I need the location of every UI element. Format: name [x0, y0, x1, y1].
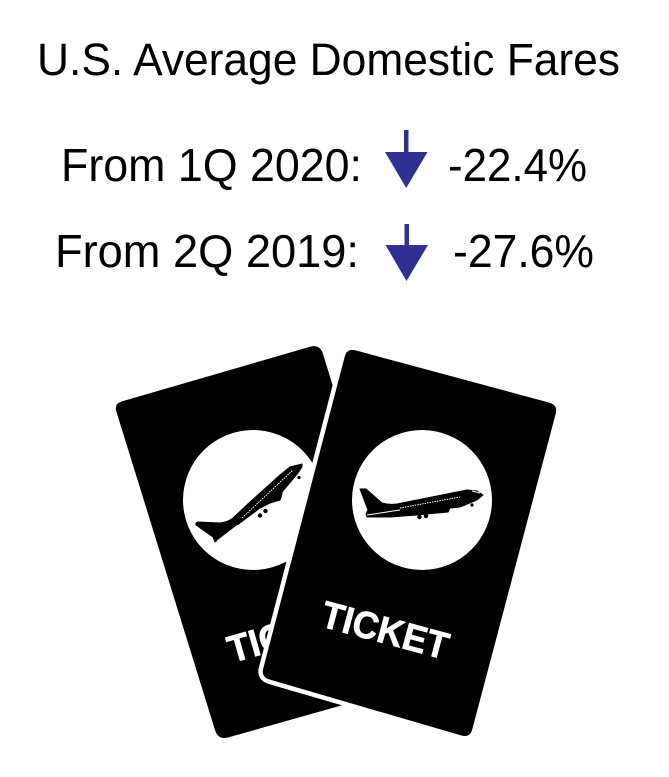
- title: U.S. Average Domestic Fares: [37, 34, 620, 85]
- ticket label: back: TICKET: [223, 595, 359, 672]
- value: -22.4%: -22.4%: [448, 139, 587, 191]
- back ticket: [116, 346, 422, 738]
- icon: down arrow 2Q 2019: [386, 224, 428, 281]
- ticket card: back: [116, 346, 422, 738]
- icon: climbing airplane: [196, 464, 302, 542]
- row: change from 1Q 2020: [61, 130, 587, 191]
- value: -27.6%: -27.6%: [453, 225, 594, 277]
- icon: airplane in flight: [360, 489, 483, 519]
- porthole: back: [183, 430, 323, 570]
- illustration: two tickets: [116, 346, 556, 738]
- ticket label: front: TICKET: [317, 594, 453, 668]
- icon: down arrow 1Q 2020: [385, 130, 428, 188]
- ticket card: front: [263, 350, 556, 736]
- porthole: front: [352, 430, 492, 570]
- label: from 1Q 2020: From 1Q 2020:: [61, 139, 362, 191]
- front ticket: [263, 350, 556, 736]
- label: from 2Q 2019: From 2Q 2019:: [55, 225, 359, 277]
- row: change from 2Q 2019: [55, 224, 594, 281]
